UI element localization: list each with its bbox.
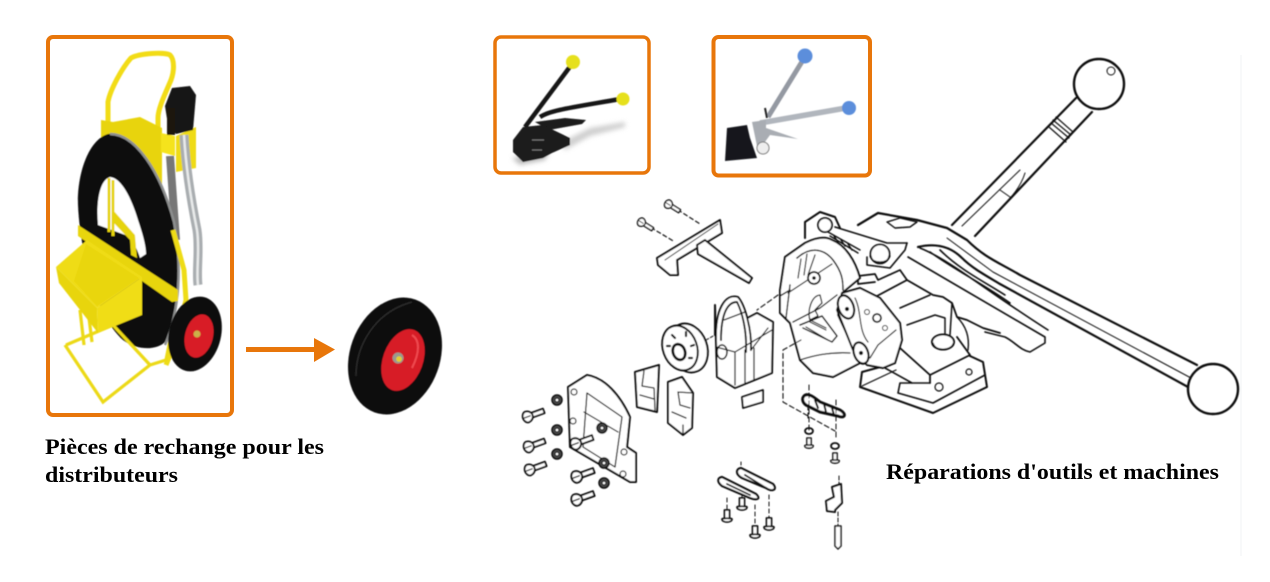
chain link and fasteners	[803, 385, 844, 463]
arched side cover	[780, 238, 860, 377]
icon: spare wheel	[332, 284, 458, 428]
lower links and screws	[718, 462, 775, 538]
icon: black strapping tool	[512, 55, 630, 165]
panel: black hand tool photo	[495, 37, 649, 173]
dashed guide lines	[757, 295, 835, 431]
tool main body	[805, 212, 1000, 413]
side link plate	[835, 288, 902, 368]
lower handle with ball	[835, 213, 1238, 414]
secondary lever	[908, 248, 1048, 352]
dispenser cart illustration	[56, 53, 229, 402]
caption: tool and machine repairs: Réparations d'outils et machines	[886, 459, 1219, 484]
caption: spare parts for dispensers	[45, 434, 324, 487]
panel: strapping dispenser cart photo	[48, 37, 232, 415]
frame: black tool	[495, 37, 649, 173]
hook part and pin	[826, 476, 842, 549]
small blocks	[635, 365, 763, 435]
frame: silver tool	[714, 37, 870, 176]
gear disc	[656, 318, 715, 378]
faint image edge	[1240, 55, 1242, 556]
icon: blue handled sealer tool	[725, 48, 856, 161]
top bracket with screws	[636, 199, 752, 283]
U-shaped block	[715, 296, 773, 388]
upper handle with ball	[952, 59, 1124, 236]
panel: silver hand tool photo	[714, 37, 870, 176]
frame: cart	[48, 37, 232, 415]
diagram: exploded view of strapping tool	[521, 59, 1238, 549]
arrow	[246, 338, 335, 362]
caption: spare parts for dispensers: distributeurs	[45, 462, 178, 487]
rear plate with screws	[521, 375, 636, 507]
caption: spare parts for dispensers: Pièces de rechange pour les	[45, 434, 324, 459]
